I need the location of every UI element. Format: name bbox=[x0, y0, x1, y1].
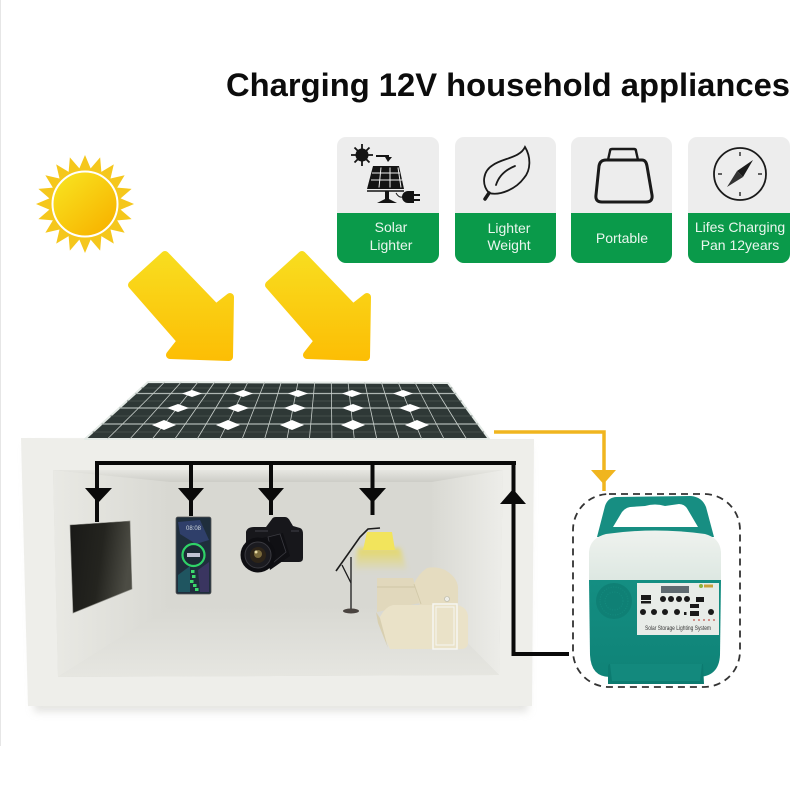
speaker grille bbox=[596, 583, 632, 619]
icon: smartphone charging bbox=[176, 517, 211, 594]
panel: house cross-section bbox=[21, 438, 534, 712]
title: Charging 12V household appliances bbox=[226, 67, 790, 103]
solar storage lighting unit bbox=[589, 496, 721, 684]
label: lighter weight: Weight bbox=[487, 237, 531, 253]
label: solar lighter: Lighter bbox=[370, 237, 413, 253]
icon: compass bbox=[714, 148, 766, 200]
teal body bbox=[589, 580, 721, 677]
lamp diffuser bbox=[589, 530, 721, 580]
arrow: sunlight left bbox=[132, 255, 230, 357]
icon: television bbox=[70, 521, 132, 613]
icon: camera bbox=[240, 517, 303, 572]
icon: sun bbox=[36, 155, 134, 253]
panel: feature card solar lighter bbox=[337, 137, 439, 263]
dashed outline around storage unit bbox=[573, 494, 740, 687]
icon: sofa bbox=[376, 567, 468, 649]
label: portable: Portable bbox=[596, 230, 648, 246]
control panel: Solar Storage Lighting System bbox=[645, 626, 711, 632]
wiring: black distribution lines and arrows bbox=[85, 463, 569, 654]
panel: feature card portable bbox=[571, 137, 672, 263]
label: lifes charging pan 12years: Lifes Charging bbox=[695, 219, 785, 235]
icon: leaf bbox=[484, 147, 529, 199]
label: lighter weight: Lighter bbox=[488, 220, 530, 236]
control panel bbox=[637, 583, 719, 635]
panel: feature card lifespan bbox=[688, 137, 790, 263]
panel: feature card lighter weight bbox=[455, 137, 556, 263]
solar panel bbox=[85, 382, 489, 439]
wiring: yellow line from panel to unit bbox=[494, 432, 616, 491]
icon: sun and solar panel with plug bbox=[351, 144, 420, 203]
handle bbox=[597, 496, 714, 537]
icon: portable bag bbox=[596, 149, 652, 202]
icon: smartphone charging: 08:08 bbox=[186, 526, 202, 532]
label: solar lighter: Solar bbox=[375, 219, 407, 235]
icon: floor lamp with light bbox=[336, 528, 408, 614]
arrow: sunlight right bbox=[269, 255, 367, 357]
label: lifes charging pan 12years: Pan 12years bbox=[701, 237, 779, 253]
